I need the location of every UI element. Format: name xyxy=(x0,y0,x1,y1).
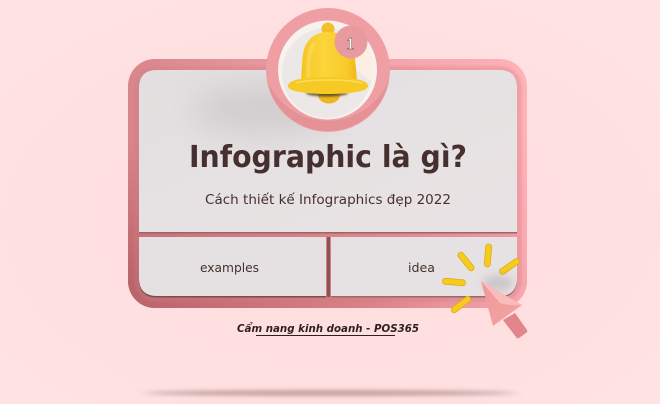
subtitle: Cách thiết kế Infographics đẹp 2022 xyxy=(205,193,451,208)
divider between buttons xyxy=(327,237,330,297)
bell shadow on panel xyxy=(190,86,334,134)
notification bell xyxy=(266,8,390,132)
panel frame xyxy=(128,59,527,308)
cursor shadow xyxy=(483,275,513,291)
notification bell: 1 xyxy=(346,34,354,53)
cursor head xyxy=(481,281,522,326)
ground shadow xyxy=(145,390,515,396)
notification badge xyxy=(334,26,368,58)
cursor arrow xyxy=(481,275,527,338)
button: examples xyxy=(139,237,326,298)
button: examples: examples xyxy=(200,261,259,275)
bell ring xyxy=(266,8,390,132)
bell button xyxy=(278,20,377,120)
bell brim xyxy=(288,77,368,94)
button: idea xyxy=(331,237,517,298)
main panel xyxy=(139,70,517,234)
bell body xyxy=(301,32,357,82)
click sparks xyxy=(442,244,521,314)
cursor stem xyxy=(503,313,527,338)
bell clapper xyxy=(318,86,340,104)
button: idea: idea xyxy=(408,261,435,275)
title: Infographic là gì? xyxy=(189,140,467,175)
infographic canvas xyxy=(128,8,528,398)
bell top knob xyxy=(322,22,334,36)
caption: Cẩm nang kinh doanh - POS365 xyxy=(237,322,419,335)
